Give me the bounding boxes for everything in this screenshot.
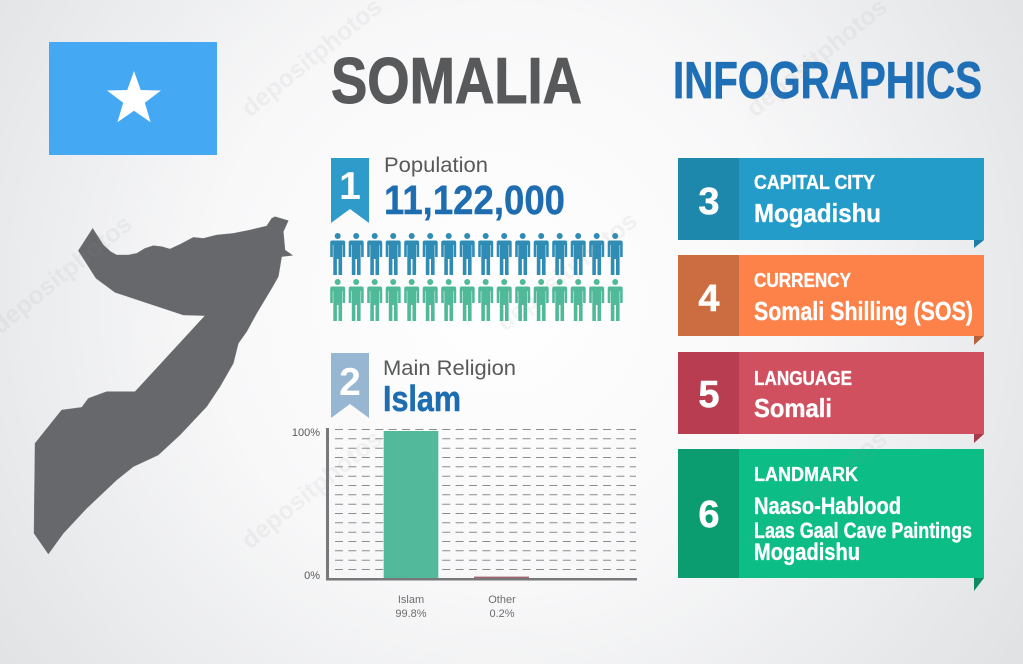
stock photo watermark: depositphotos	[491, 207, 643, 337]
panel 6: landmark	[678, 449, 984, 591]
panel 5: language: 5	[698, 374, 720, 416]
panel 4: currency: 4	[698, 278, 720, 320]
axis label 0%: 0%	[304, 570, 320, 582]
panel 6: landmark: 6	[698, 494, 720, 536]
panel 6: landmark: Mogadishu	[754, 539, 860, 566]
panel 3: capital city: 3	[698, 181, 720, 223]
panel 3: capital city	[678, 158, 984, 248]
section 1: population header	[331, 154, 565, 223]
ribbon 2	[331, 353, 369, 418]
panel 4: currency	[678, 255, 984, 345]
population label: Population	[384, 154, 488, 177]
religion value: Islam	[383, 378, 461, 419]
ribbon 1	[331, 158, 369, 223]
y axis	[326, 428, 329, 580]
panel 5: language: Somali	[754, 393, 832, 423]
panel 4: currency: CURRENCY	[754, 270, 852, 292]
flag of Somalia	[49, 42, 217, 155]
bar chart: religion	[292, 427, 637, 620]
ribbon 2: 2	[339, 361, 361, 404]
map of Somalia	[34, 217, 293, 554]
title: Somalia: SOMALIA	[331, 44, 582, 117]
panel 4: currency: Somali Shilling (SOS)	[754, 296, 973, 326]
panel 5: language	[678, 352, 984, 443]
axis label 100%: 100%	[292, 427, 320, 439]
ribbon 1: 1	[339, 165, 361, 208]
stock photo watermark: depositphotos	[741, 425, 893, 555]
panel 6: landmark: Laas Gaal Cave Paintings	[754, 518, 972, 543]
section 2: religion header	[331, 353, 516, 419]
panel 3: capital city: CAPITAL CITY	[754, 172, 876, 194]
panel 3: capital city: Mogadishu	[754, 198, 881, 228]
religion label: Main Religion	[383, 357, 516, 380]
category label: Other: 0.2%	[489, 608, 515, 620]
population value: 11,122,000	[384, 177, 565, 223]
panel 6: landmark: Naaso-Hablood	[754, 493, 901, 520]
pictogram row: green people	[330, 279, 623, 321]
x axis	[326, 578, 637, 580]
category label: Other: Other	[488, 594, 516, 606]
category label: Islam: Islam	[398, 594, 424, 606]
pictogram row: blue people	[330, 233, 623, 275]
category label: Islam: 99.8%	[395, 608, 427, 620]
panel 6: landmark: LANDMARK	[754, 464, 858, 486]
bar: Other	[474, 577, 529, 578]
panel 5: language: LANGUAGE	[754, 368, 852, 390]
stock photo watermark: depositphotos	[236, 425, 388, 555]
bar: Islam	[384, 431, 438, 578]
stock photo watermark	[0, 0, 893, 555]
